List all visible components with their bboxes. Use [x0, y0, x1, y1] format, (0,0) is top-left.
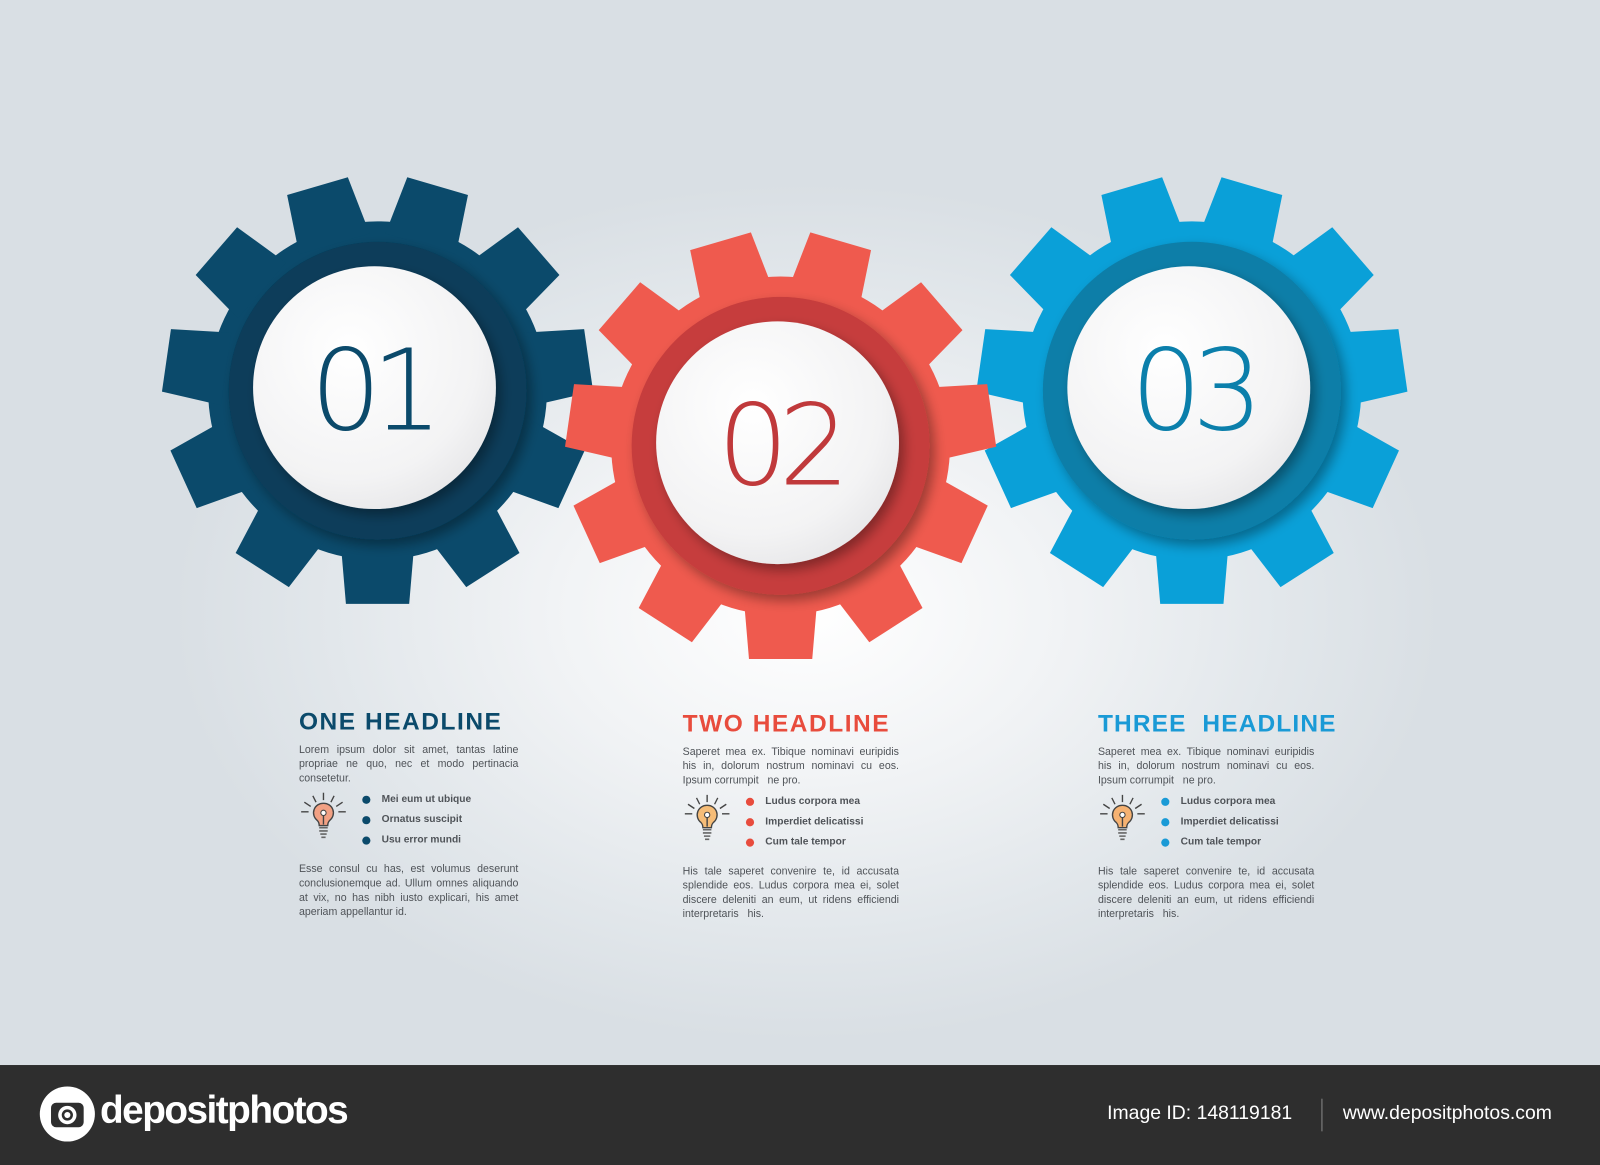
bullets with bulb icon: Usu error mundi: [382, 834, 461, 846]
footer bar: [0, 1065, 1600, 1165]
bullets with bulb icon: [684, 794, 863, 848]
icon: light bulb: [1100, 794, 1145, 840]
panel: three: [1098, 710, 1337, 920]
gear 1: [161, 176, 594, 604]
bullets with bulb icon: Cum tale tempor: [1181, 837, 1261, 848]
text: intro three: Saperet mea ex. Tibique nominavi euripidis his in, dolorum nostrum nominavi cu eos. Ipsum corrumpit ne pro.: [1098, 747, 1314, 787]
website text: www.depositphotos.com: [1343, 1103, 1552, 1124]
bullets with bulb icon: [1100, 794, 1279, 848]
number 02: 02: [717, 382, 840, 512]
logo: depositphotos: [100, 1090, 347, 1132]
bullets with bulb icon: Mei eum ut ubique: [382, 794, 471, 805]
icon: light bulb: [684, 794, 730, 840]
text: intro one: Lorem ipsum dolor sit amet, tantas latine propriae ne quo, nec et modo pertinacia consetetur.: [299, 745, 518, 784]
number 01: 01: [310, 326, 433, 456]
panel: one: [299, 708, 518, 918]
gear 2: [564, 231, 997, 659]
bullets with bulb icon: Cum tale tempor: [765, 837, 846, 848]
number 03: 03: [1131, 326, 1253, 456]
text: intro two: Saperet mea ex. Tibique nominavi euripidis his in, dolorum nostrum nominavi cu eos. Ipsum corrumpit ne pro.: [683, 747, 899, 787]
heading: two headline: TWO HEADLINE: [683, 710, 890, 738]
bullets with bulb icon: Ludus corpora mea: [1181, 796, 1275, 807]
heading: three headline: THREE HEADLINE: [1098, 710, 1337, 738]
icon: light bulb: [301, 792, 346, 838]
bullets with bulb icon: Ludus corpora mea: [765, 796, 860, 807]
bullets with bulb icon: Imperdiet delicatissi: [765, 816, 863, 827]
gears illustration: [162, 177, 1408, 659]
text: body three: His tale saperet convenire te, id accusata splendide eos. Ludus corpora mea ei, solet discere deleniti an eum, ut ridens efficiendi interpretaris his.: [1098, 866, 1314, 920]
heading: one headline: ONE HEADLINE: [299, 708, 502, 736]
text: body one: Esse consul cu has, est volumus deserunt conclusionemque ad. Ullum omnes aliquando at vix, no has nibh iusto explicari, his amet aperiam appellantur id.: [299, 864, 518, 918]
icon: camera logo: [40, 1086, 95, 1142]
image id text: Image ID: 148119181: [1107, 1103, 1292, 1124]
text: body two: His tale saperet convenire te, id accusata splendide eos. Ludus corpora mea ei, solet discere deleniti an eum, ut ridens efficiendi interpretaris his.: [683, 866, 899, 920]
bullets with bulb icon: Imperdiet delicatissi: [1181, 816, 1279, 827]
logo: [40, 1086, 348, 1142]
gear 3: [976, 176, 1408, 604]
bullets with bulb icon: [301, 792, 471, 846]
bullets with bulb icon: Ornatus suscipit: [382, 814, 462, 825]
panel: two: [682, 710, 899, 920]
